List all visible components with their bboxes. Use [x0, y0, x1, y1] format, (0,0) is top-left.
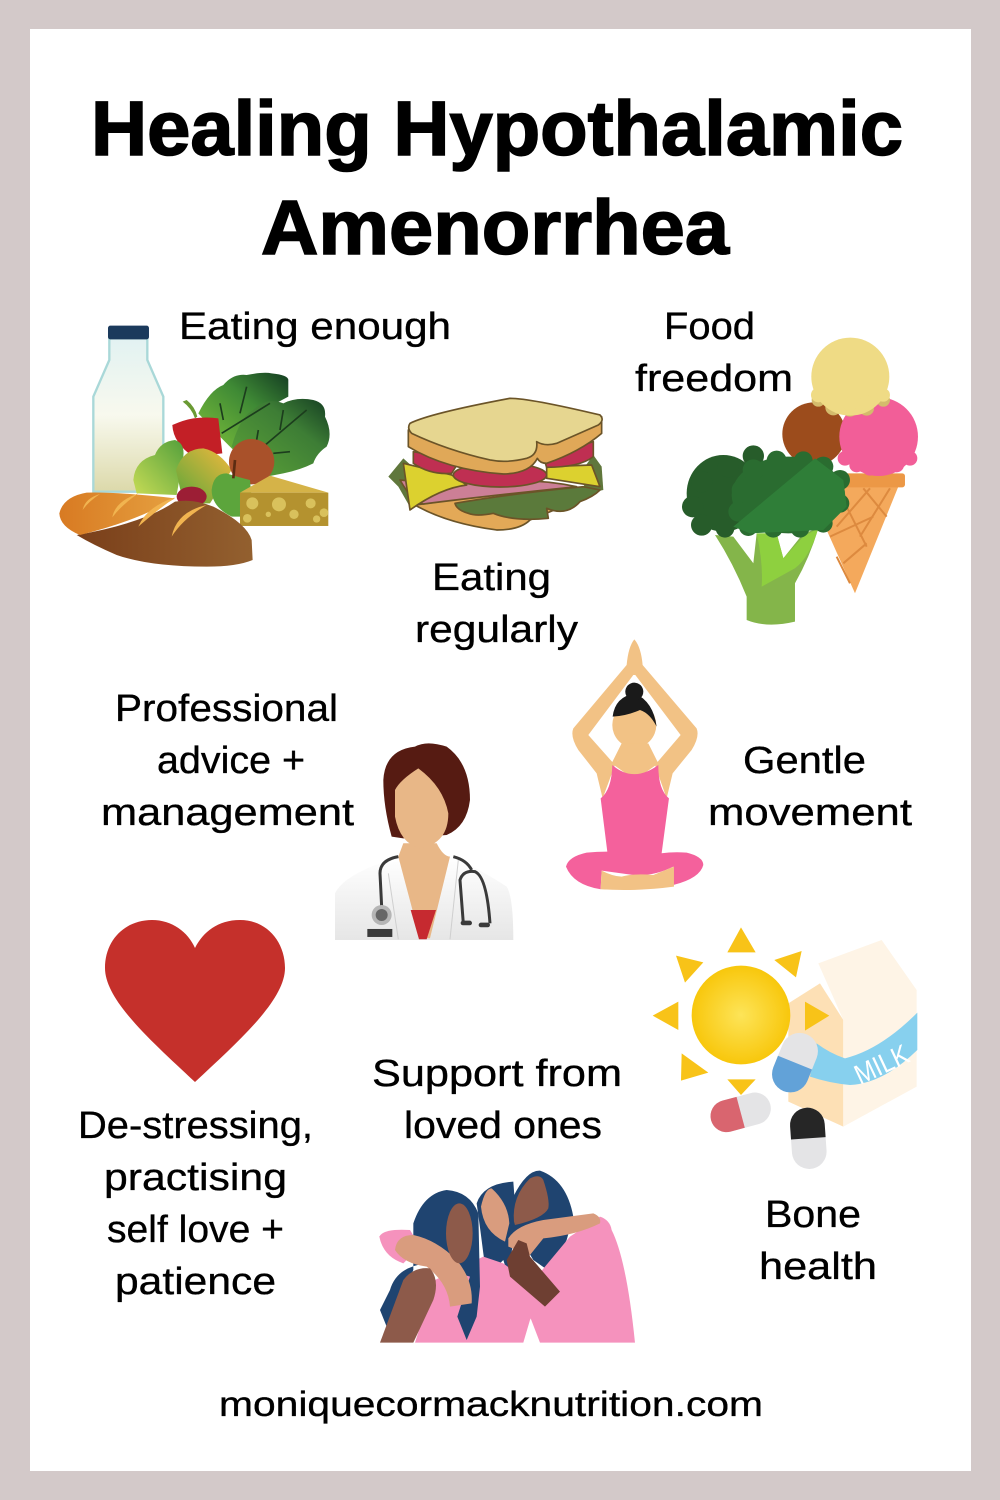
icon: sun, milk and pills: MILK [849, 1038, 914, 1090]
label: bone health: Bone [765, 1194, 861, 1236]
label: professional advice: Professional [115, 688, 338, 730]
label: de-stressing: practising [104, 1157, 287, 1199]
icon: broccoli and ice cream [682, 338, 918, 625]
label: eating enough: Eating enough [179, 306, 451, 348]
label: bone health: health [759, 1246, 877, 1288]
label: food freedom: Food [664, 306, 755, 348]
label: professional advice [101, 688, 354, 834]
label: bone health [759, 1194, 877, 1288]
label: de-stressing: self love + [107, 1209, 284, 1251]
icon: sun, milk and pills [653, 927, 917, 1170]
label: eating regularly: Eating [432, 557, 551, 599]
icon: heart [105, 920, 285, 1082]
label: support from loved ones [372, 1053, 622, 1147]
icon: doctor [335, 743, 513, 940]
website footer: moniquecormacknutrition.com [219, 1385, 763, 1424]
label: eating regularly [415, 557, 578, 651]
label: de-stressing: De-stressing, [78, 1105, 313, 1147]
label: gentle movement [708, 740, 913, 834]
title [91, 86, 903, 271]
label: gentle movement: movement [708, 792, 913, 834]
label: de-stressing [78, 1105, 313, 1303]
label: support from loved ones: Support from [372, 1053, 622, 1095]
icon: sandwich [388, 398, 603, 530]
title: Amenorrhea [261, 185, 730, 271]
icon: three friends hugging [379, 1171, 635, 1343]
label: food freedom [635, 306, 793, 400]
icon: groceries [59, 326, 330, 567]
label: support from loved ones: loved ones [404, 1105, 602, 1147]
label: professional advice: advice + [157, 740, 305, 782]
label: professional advice: management [101, 792, 354, 834]
title: Healing Hypothalamic [91, 86, 903, 172]
icon: yoga figure [566, 639, 703, 890]
label: de-stressing: patience [115, 1261, 276, 1303]
label: gentle movement: Gentle [743, 740, 866, 782]
label: eating regularly: regularly [415, 609, 578, 651]
label: food freedom: freedom [635, 358, 793, 400]
